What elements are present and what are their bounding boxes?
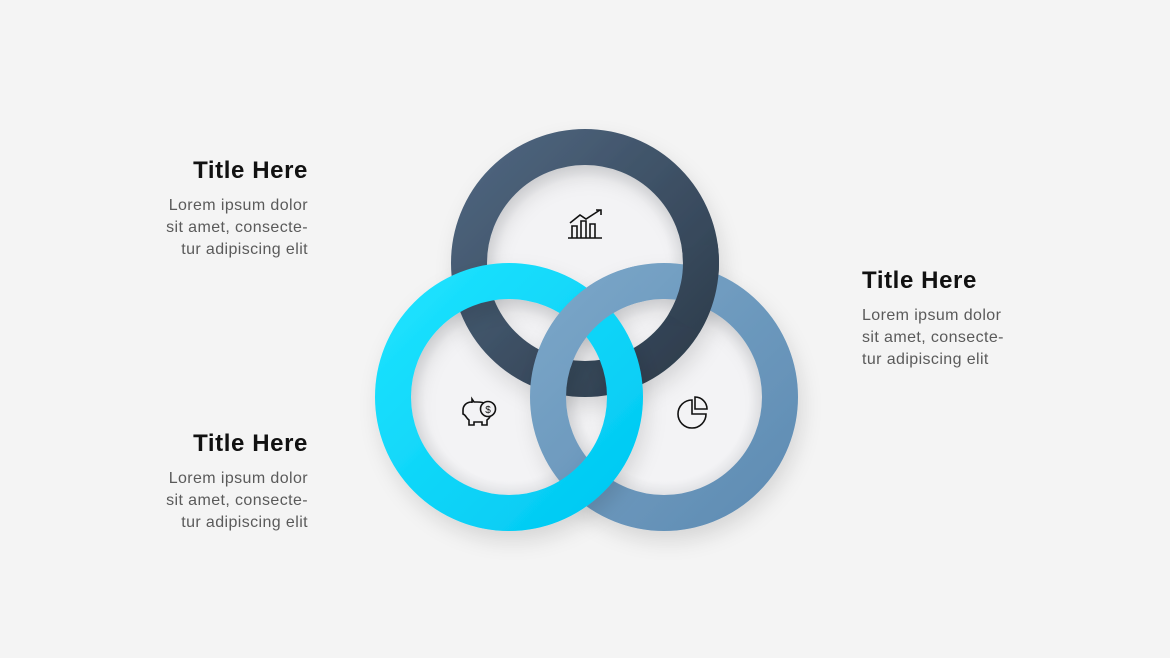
- text block: right: [862, 267, 1004, 368]
- text block: top left: Lorem ipsum dolor: [169, 197, 308, 214]
- ring: dark top: [469, 147, 701, 379]
- icon: bar chart: [568, 210, 602, 238]
- text block: top left: Title Here: [193, 157, 308, 184]
- text block: top left: tur adipiscing elit: [181, 241, 308, 258]
- text block: bottom left: tur adipiscing elit: [181, 514, 308, 531]
- ring crossing patches: [554, 246, 701, 362]
- text block: right: sit amet, consecte-: [862, 329, 1004, 346]
- hole backgrounds: [410, 164, 763, 496]
- ring: blue right: [548, 281, 780, 513]
- text block: right: Title Here: [862, 267, 977, 294]
- text block: bottom left: Lorem ipsum dolor: [169, 470, 308, 487]
- text block: bottom left: sit amet, consecte-: [166, 492, 308, 509]
- icon: piggy bank: $: [485, 405, 491, 416]
- text block: right: Lorem ipsum dolor: [862, 307, 1001, 324]
- icon: piggy bank: [463, 399, 496, 425]
- text block: top left: [166, 157, 308, 258]
- text block: bottom left: [166, 430, 308, 531]
- icon: pie chart: [678, 397, 707, 428]
- text block: right: tur adipiscing elit: [862, 351, 989, 368]
- text block: top left: sit amet, consecte-: [166, 219, 308, 236]
- ring: cyan left: [393, 281, 625, 513]
- text block: bottom left: Title Here: [193, 430, 308, 457]
